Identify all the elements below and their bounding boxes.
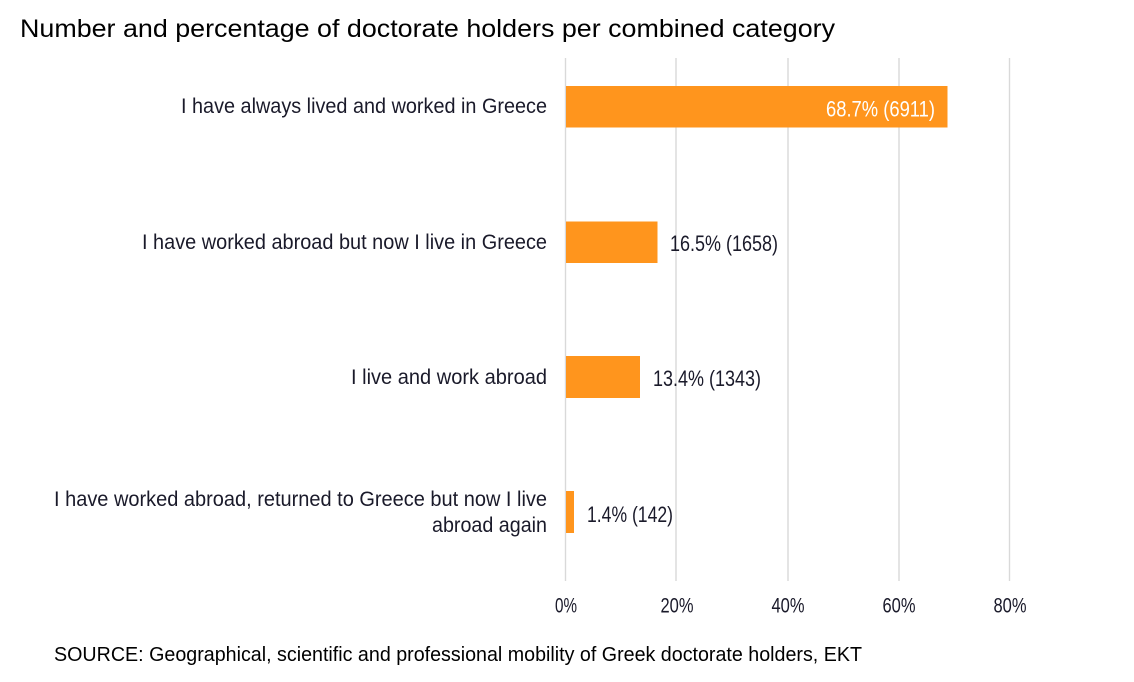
bar: returned, abroad again: 1.4% (142) — [587, 502, 673, 527]
category labels: I have worked abroad but now I live in Greece — [142, 230, 547, 254]
source note: SOURCE: Geographical, scientific and professional mobility of Greek doctorate holders, EKT — [54, 644, 862, 666]
axis labels: 0% — [555, 594, 577, 618]
axis labels — [555, 594, 1026, 618]
axis labels: 60% — [882, 594, 916, 618]
category labels — [54, 94, 547, 537]
category labels: I have always lived and worked in Greece — [181, 94, 547, 118]
category labels: I have worked abroad, returned to Greece but now I live — [54, 487, 547, 511]
bar: live and work abroad: 13.4% (1343) — [653, 366, 761, 391]
category labels: I live and work abroad — [351, 365, 547, 389]
axis labels: 20% — [660, 594, 694, 618]
axis labels: 40% — [772, 594, 804, 618]
bar: returned, abroad again — [566, 491, 673, 533]
bar: live and work abroad — [566, 356, 761, 398]
axis labels: 80% — [994, 594, 1026, 618]
bar: worked abroad, now in Greece — [566, 222, 778, 263]
bar chart — [54, 58, 1026, 618]
title: Number and percentage of doctorate holders per combined category — [20, 15, 836, 43]
bar: worked abroad, now in Greece: 16.5% (1658) — [670, 231, 778, 256]
category labels: abroad again — [432, 513, 547, 537]
bar: always lived and worked in Greece — [566, 86, 948, 128]
bar: always lived and worked in Greece: 68.7% (6911) — [826, 96, 935, 122]
